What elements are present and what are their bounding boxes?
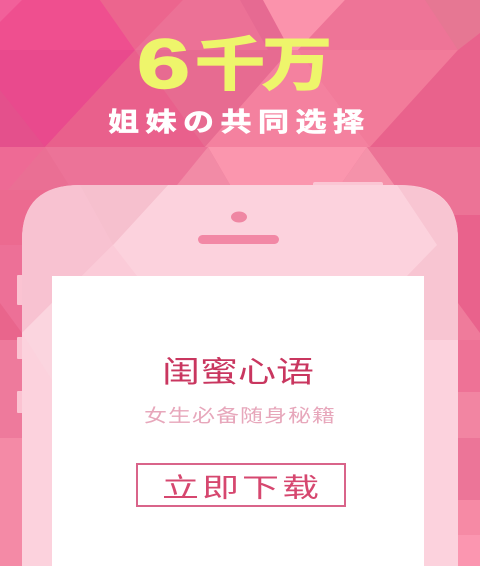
phone speaker slot bbox=[198, 235, 279, 244]
phone side button: top bbox=[313, 182, 383, 187]
subheading: 姐妹の共同选择 bbox=[108, 108, 364, 137]
tagline: 女生必备随身秘籍 bbox=[144, 406, 335, 426]
download button bbox=[137, 464, 345, 506]
phone body bbox=[22, 185, 458, 566]
phone side button: lower left bbox=[17, 391, 23, 413]
app name: 闺蜜心语 bbox=[162, 356, 314, 389]
phone speaker camera dot bbox=[231, 212, 247, 222]
headline: 60 million bbox=[137, 25, 332, 103]
download button: 立即下载 bbox=[162, 473, 319, 503]
phone side button: middle left bbox=[17, 337, 23, 359]
phone side button: upper left bbox=[17, 275, 23, 305]
headline: 60 million: 千万 bbox=[195, 31, 332, 98]
phone screen bbox=[52, 276, 424, 566]
headline: 60 million: 6 bbox=[137, 25, 190, 103]
